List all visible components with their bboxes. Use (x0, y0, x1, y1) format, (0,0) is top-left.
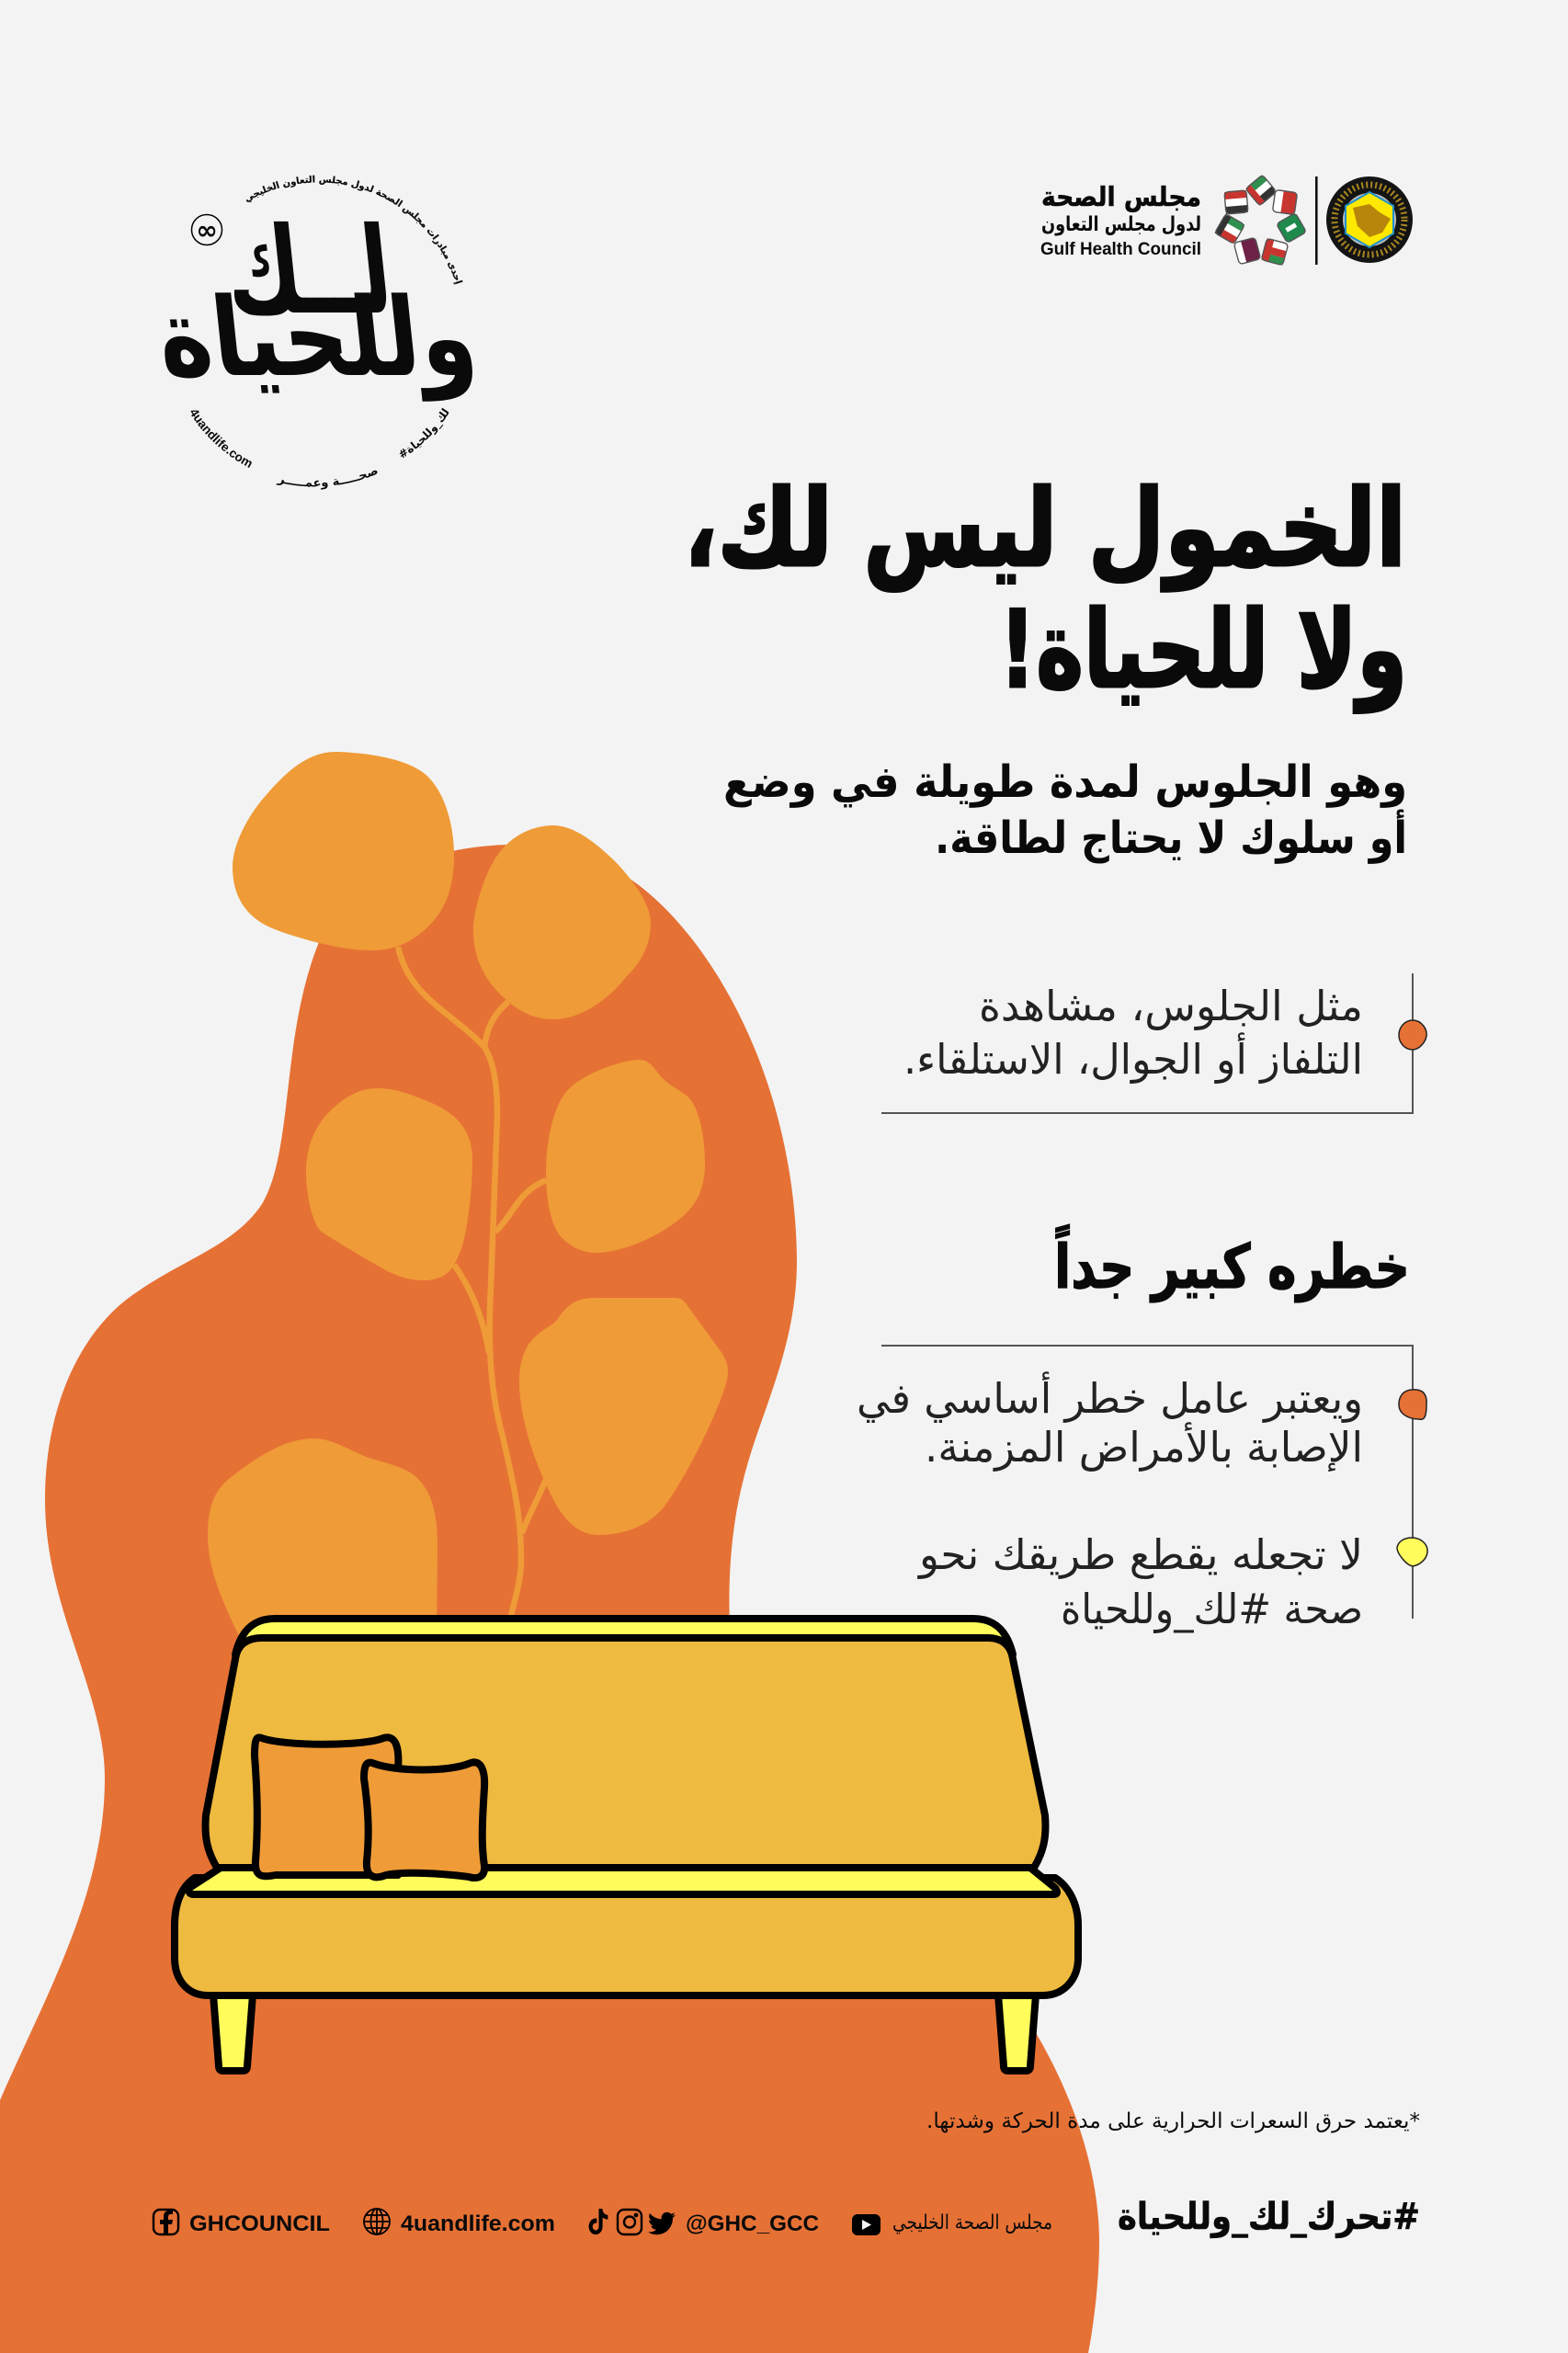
examples text: التلفاز أو الجوال، الاستلقاء. (903, 1032, 1363, 1085)
advice text: لا تجعله يقطع طريقك نحو (917, 1530, 1363, 1579)
curved website text: 4uandlife.com (191, 410, 252, 468)
orange blob background (0, 845, 1099, 2353)
website: 4uandlife.com (401, 2211, 555, 2236)
leaf 4 (546, 1060, 705, 1253)
icon: youtube (852, 2214, 881, 2235)
footnote: *يعتمد حرق السعرات الحرارية على مدة الحركة وشدتها. (926, 2109, 1420, 2133)
advice text (917, 1530, 1363, 1634)
logo wordmark (144, 201, 483, 402)
facebook handle: GHCOUNCIL (189, 2211, 330, 2236)
examples text (903, 982, 1363, 1085)
council name: مجلس الصحة (1041, 181, 1201, 212)
curved hashtag text: #لك_وللحياة (399, 408, 449, 458)
council name: لدول مجلس التعاون (1041, 213, 1201, 236)
yellow marker (1397, 1538, 1427, 1566)
icon: facebook (153, 2210, 178, 2234)
leaf 1 (233, 752, 454, 950)
gcc emblem (1326, 176, 1413, 263)
council logo (1040, 175, 1413, 266)
advice text: صحة #لك_وللحياة (1061, 1585, 1363, 1634)
heading: risk: خطره كبير جداً (1054, 1223, 1410, 1302)
orange marker (1399, 1390, 1426, 1419)
risk factor text (857, 1371, 1363, 1472)
orange marker (1399, 1020, 1426, 1050)
logo wordmark: وللحياة (152, 274, 483, 402)
sofa right leg (998, 1995, 1036, 2071)
sofa back (206, 1638, 1046, 1868)
examples text: مثل الجلوس، مشاهدة (979, 982, 1363, 1030)
infinity badge (191, 215, 222, 245)
leaf 2 (473, 825, 651, 1019)
leaf 5 (519, 1298, 728, 1535)
risk factor text: الإصابة بالأمراض المزمنة. (925, 1421, 1363, 1472)
subtitle (723, 756, 1407, 864)
plant stems (398, 947, 550, 1620)
flags star (1215, 175, 1306, 266)
curved initiative text: إحدى مبادرات مجلس الصحة لدول مجلس التعاون الخليجي (246, 175, 463, 285)
infinity badge: ∞ (196, 215, 218, 245)
divider (1315, 176, 1318, 265)
campaign logo (152, 175, 483, 490)
hashtag: #تحرك_لك_وللحياة (1118, 2196, 1420, 2238)
sofa (175, 1619, 1078, 2071)
risk factor text: ويعتبر عامل خطر أساسي في (857, 1371, 1363, 1424)
youtube channel name: مجلس الصحة الخليجي (892, 2211, 1052, 2234)
sofa seat base (175, 1878, 1078, 1995)
footer bar (153, 2196, 1420, 2238)
callout: risks (857, 1346, 1427, 1634)
main title (684, 467, 1407, 713)
icon: instagram (618, 2210, 642, 2234)
callout: examples (881, 973, 1426, 1113)
council name: Gulf Health Council (1040, 240, 1201, 259)
sofa seat cushion (189, 1868, 1057, 1894)
plant (208, 752, 728, 1654)
council name (1040, 181, 1201, 259)
subtitle: أو سلوك لا يحتاج لطاقة. (935, 809, 1407, 864)
front pillow (364, 1762, 484, 1878)
sofa top band (235, 1619, 1013, 1654)
sofa left leg (213, 1995, 253, 2071)
main title: ولا للحياة! (999, 588, 1407, 713)
curved slogan text: صحـــــة وعمـــــر (276, 471, 377, 490)
icon: globe (364, 2209, 390, 2234)
logo wordmark: لــك (219, 201, 398, 341)
main title: الخمول ليس لك، (684, 467, 1406, 592)
leaf 6 (208, 1438, 437, 1654)
back pillow (255, 1737, 398, 1876)
icon: twitter (648, 2212, 676, 2234)
leaf 3 (306, 1088, 472, 1280)
subtitle: وهو الجلوس لمدة طويلة في وضع (723, 756, 1407, 808)
handle: @GHC_GCC (686, 2211, 819, 2236)
icon: tiktok (589, 2209, 608, 2234)
